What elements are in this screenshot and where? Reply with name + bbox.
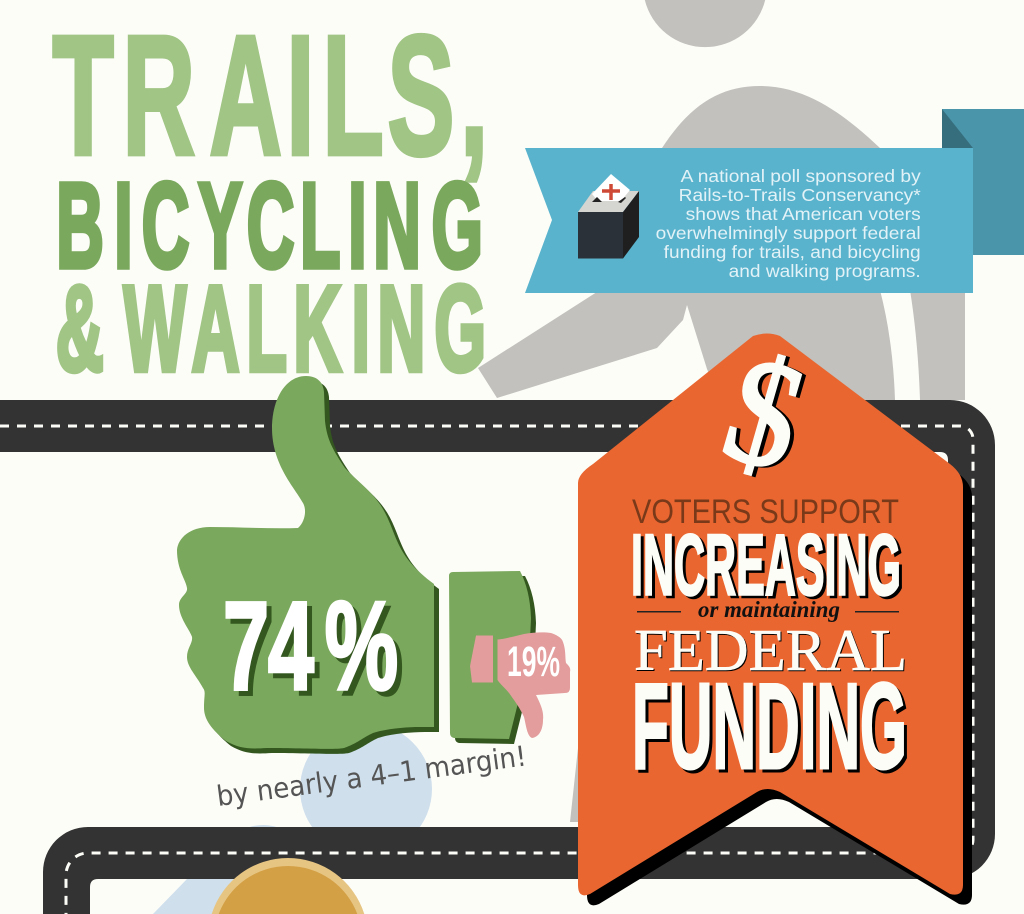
icon: dollar sign: $: [712, 324, 824, 505]
road: [0, 400, 995, 914]
ribbon: poll intro: [525, 109, 1024, 293]
poll text: and walking programs.: [729, 261, 921, 281]
banner heading: VOTERS SUPPORT: [632, 493, 899, 531]
margin note: by nearly a 4–1 margin!: [215, 739, 528, 813]
icon: dollar sign: $: [708, 323, 820, 504]
banner heading: [631, 493, 910, 797]
coin: [212, 858, 364, 914]
icon: ballot box: [578, 174, 639, 258]
poll text: A national poll sponsored by: [681, 166, 921, 186]
thumbs down 19%: [470, 632, 570, 738]
poll text: overwhelmingly support federal: [656, 223, 921, 243]
title: &WALKING: [56, 260, 486, 397]
poll text: Rails-to-Trails Conservancy*: [679, 185, 921, 205]
banner heading: FEDERAL: [634, 617, 907, 683]
poll text: [656, 166, 921, 281]
19 percent figure: 19%: [507, 638, 560, 686]
poll text: funding for trails, and bicycling: [664, 242, 921, 262]
74 percent figure: 74%: [228, 582, 403, 721]
title: TRAILS,: [53, 1, 488, 191]
title: [53, 1, 488, 397]
banner heading: or maintaining: [698, 597, 840, 622]
background walking figure: [478, 0, 965, 822]
orange funding banner: [578, 323, 972, 905]
title: BICYCLING: [56, 158, 483, 293]
banner heading: FEDERAL: [635, 618, 908, 684]
74 percent figure: 74%: [223, 577, 398, 716]
thumbs up 74%: [177, 376, 536, 754]
poll text: shows that American voters: [686, 204, 921, 224]
pale blue circles: [153, 723, 432, 914]
